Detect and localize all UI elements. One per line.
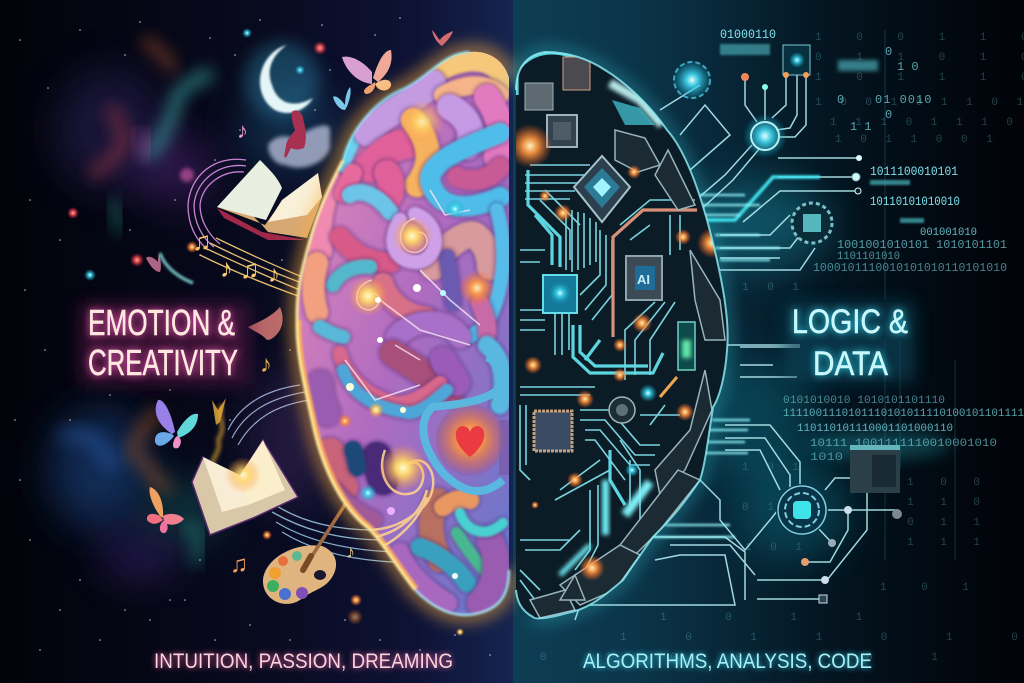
binary strings: bright labels: 1000101110010101010110101010	[813, 261, 1007, 275]
butterfly: small pink	[432, 30, 453, 46]
background: cosmic left side	[0, 0, 513, 683]
music notes: ♪	[346, 542, 355, 562]
music notes: ♪	[237, 118, 248, 143]
music notes: ♫	[240, 254, 260, 284]
binary rain background: 1 0 1	[880, 582, 983, 594]
music notes: ♪	[220, 253, 233, 283]
moon	[260, 45, 313, 113]
paint palette	[263, 503, 346, 604]
swirl highlights	[345, 190, 480, 400]
book lower	[192, 440, 298, 535]
spark glows	[338, 100, 495, 579]
binary strings: bright labels: 001001010	[920, 227, 977, 239]
heading: Logic & Data	[792, 303, 908, 383]
heading: Emotion & Creativity: CREATIVITY	[88, 342, 238, 383]
bright rain digits top	[837, 45, 932, 134]
binary strings: bright labels: 10111 1001111110010001010	[810, 438, 997, 450]
board base	[514, 40, 734, 630]
binary rain background: 1 0 0	[907, 477, 990, 489]
bright rain digits top: 0	[885, 45, 892, 59]
binary strings: bright labels: 0101010010 1010101101110	[783, 395, 945, 407]
binary strings: bright labels: 1001001010101 1010101101	[837, 238, 1007, 252]
heart glow	[434, 403, 506, 475]
bright glass strip	[610, 83, 662, 125]
brain outline upper cyan	[343, 52, 470, 160]
background: data right side	[513, 0, 1024, 683]
chip: diamond	[574, 156, 630, 222]
binary rain background: 0 1 1	[742, 502, 805, 514]
bright rain digits top: 0	[837, 93, 844, 107]
music notes	[192, 118, 355, 578]
stars	[15, 18, 490, 655]
binary rain background: 1 0 1 1	[660, 612, 888, 624]
chip: lower right panel	[850, 445, 900, 493]
orange glow line	[612, 255, 618, 370]
music staff gold	[200, 238, 305, 296]
subheading: left: INTUITION, PASSION, DREAMING	[154, 650, 453, 673]
heading: Emotion & Creativity: EMOTION &	[88, 302, 235, 343]
music notes: ♫	[192, 226, 212, 256]
heart icon	[456, 426, 484, 457]
music notes: ♪	[268, 261, 280, 288]
binary rain background: 1 1 0	[907, 497, 990, 509]
binary rain background: 1 0 1 1 0 0 1	[835, 134, 999, 146]
bright rain digits top: 0	[885, 108, 892, 122]
orange sparks	[524, 165, 727, 581]
teal speckled patch	[612, 100, 655, 125]
binary rain background	[540, 32, 1024, 664]
binary strings: bright labels: 01000110	[720, 28, 776, 42]
binary strings: bright labels: 1111001110101110101011110100101101111	[783, 408, 1024, 420]
node: small square chip	[792, 203, 832, 243]
binary strings: bright labels	[720, 28, 1024, 464]
text glow panel left	[80, 303, 250, 385]
chip: top gray	[525, 83, 553, 110]
green component	[678, 322, 695, 370]
chip: gray large	[547, 115, 577, 147]
bright horizontal lines near brain	[653, 195, 780, 537]
heading: Logic & Data: DATA	[813, 345, 888, 383]
binary rain background: 1 0 1	[745, 542, 808, 554]
binary strings: bright labels: 1011100010101	[870, 165, 958, 179]
subheading: right: ALGORITHMS, ANALYSIS, CODE	[583, 650, 872, 673]
circuit nodes	[672, 45, 902, 603]
salmon trace	[613, 210, 697, 337]
binary strings: bright labels: 10110101010010	[870, 195, 960, 209]
outer warm glow	[297, 52, 509, 615]
sparks from book	[210, 405, 222, 470]
music staff purple arc	[188, 159, 246, 250]
butterfly: small left pink	[146, 254, 161, 272]
chip: cyan	[543, 275, 577, 313]
upper gyri folds	[313, 59, 507, 337]
cloud	[268, 125, 330, 168]
fold: blue ring around heart	[423, 357, 503, 491]
music notes: ♫	[230, 551, 248, 578]
binary strings: bright labels: 1101101010	[837, 251, 900, 263]
wisp: teal ribbon	[160, 253, 193, 283]
thick cyan traces	[517, 53, 663, 505]
teal glow streaks	[690, 30, 955, 560]
hemisphere outline	[516, 52, 728, 618]
binary strings: bright labels: 110110101110001101000110	[797, 423, 953, 435]
dreaming figure	[284, 110, 306, 158]
binary rain background: 0 1 0 0 1 0 1	[540, 652, 964, 664]
node: lower hub	[776, 484, 828, 536]
thick glowing trace	[700, 177, 820, 220]
glowing star dots	[67, 28, 464, 636]
node: small boxed chip	[783, 45, 810, 75]
book upper	[217, 160, 322, 240]
music staff waves lower	[268, 500, 395, 562]
center divider line	[512, 20, 514, 660]
base colour	[297, 52, 509, 615]
butterfly: faint near text	[248, 307, 283, 340]
moon glow	[244, 42, 320, 118]
external circuit traces	[575, 72, 897, 620]
circle gauge	[609, 397, 635, 423]
lobe: heart pocket	[436, 404, 504, 476]
text glow panel right	[785, 302, 915, 382]
nebula clouds	[50, 40, 340, 580]
brain outline bottom cyan	[415, 570, 509, 615]
binary rain background: 1 0 1	[742, 462, 805, 474]
orange accent stripe	[660, 377, 677, 397]
bright rain digits top: 1 0	[897, 60, 919, 74]
creative elements left	[146, 30, 453, 604]
circuit traces dense	[520, 165, 695, 600]
left brain: organic swirling hemisphere	[290, 40, 515, 630]
orange outer rim	[297, 320, 415, 590]
binary rain background: 1 0 1	[742, 282, 805, 294]
butterfly: large orange top	[342, 50, 392, 94]
glow: orange	[516, 124, 552, 168]
small golden butterfly	[212, 398, 226, 425]
heading: Logic & Data: LOGIC &	[792, 303, 908, 341]
music notes: ♪	[260, 351, 272, 378]
dark armor panels	[530, 130, 725, 618]
binary strings: bright labels: 1010	[810, 452, 843, 464]
node: upper hub	[743, 114, 787, 158]
center divider glow	[508, 10, 518, 670]
node: top right hub	[672, 60, 712, 100]
bright rain digits top: 1 1	[850, 120, 872, 134]
lower gyri folds	[320, 345, 503, 603]
right brain: circuit hemisphere	[508, 40, 734, 630]
binary rain background: 1 1 1	[907, 537, 990, 549]
brain outline warm	[297, 160, 415, 590]
chip: lower gray	[534, 411, 572, 451]
music staff waves mid	[228, 385, 310, 445]
butterfly: rainbow	[155, 400, 198, 448]
heading: Emotion & Creativity	[88, 302, 238, 383]
purple right edge	[499, 420, 509, 475]
chip: AI: AI	[637, 272, 650, 287]
butterfly: small blue	[333, 87, 351, 110]
bright rain digits top: 01 0010	[875, 93, 932, 107]
cyan glow bars	[560, 384, 657, 575]
butterfly: pink lower	[147, 487, 184, 533]
chip: AI	[626, 256, 662, 300]
binary rain background: 0 1 1	[907, 517, 990, 529]
hemisphere glow	[516, 52, 728, 618]
swirl arms	[367, 450, 433, 548]
chip: tan	[563, 57, 590, 90]
